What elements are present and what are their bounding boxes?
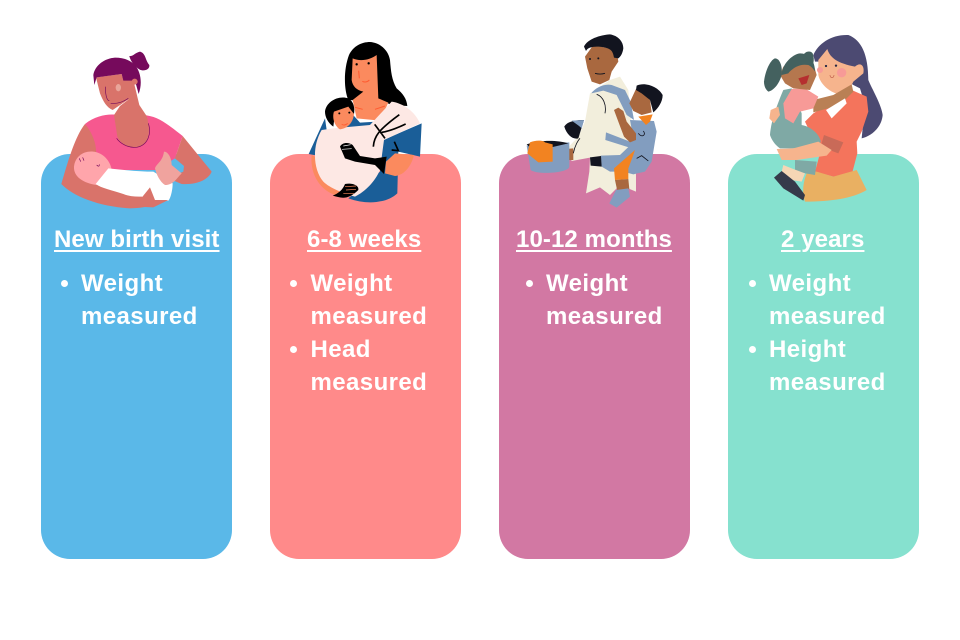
icon: father carrying child on back (527, 34, 663, 208)
text block: 2 years list: measured (769, 369, 886, 396)
panel: 2 years (728, 154, 919, 559)
text block: 6-8 weeks list (290, 270, 427, 396)
heading: 2 years: 2 years (781, 226, 864, 253)
text block: 2 years list: Height (769, 336, 846, 363)
icon: mother holding newborn (61, 52, 212, 208)
text block: new birth visit list: measured (81, 303, 198, 330)
panel: 10-12 months (499, 154, 690, 559)
text block: new birth visit list (61, 270, 198, 330)
text block: 6-8 weeks list: Weight (310, 270, 393, 297)
icon: mother with baby in sling (309, 42, 422, 202)
text block: 6-8 weeks list: measured (310, 369, 427, 396)
icon: mother hugging toddler (764, 35, 883, 202)
text block: 2 years list: measured (769, 303, 886, 330)
text block: 10-12 months list: Weight (546, 270, 628, 297)
text block: 10-12 months list (526, 270, 663, 330)
panel: new birth visit (41, 154, 232, 559)
text block: 2 years list (749, 270, 886, 396)
text block: 6-8 weeks list: measured (310, 303, 427, 330)
heading: 10-12 months: 10-12 months (516, 226, 672, 253)
heading: new birth visit: New birth visit (54, 226, 220, 253)
text block: 6-8 weeks list: Head (310, 336, 371, 363)
text block: new birth visit list: Weight (81, 270, 163, 297)
panel: 6-8 weeks (270, 154, 461, 559)
text block: 2 years list: Weight (769, 270, 851, 297)
heading: 6-8 weeks: 6-8 weeks (307, 226, 421, 253)
text block: 10-12 months list: measured (546, 303, 663, 330)
